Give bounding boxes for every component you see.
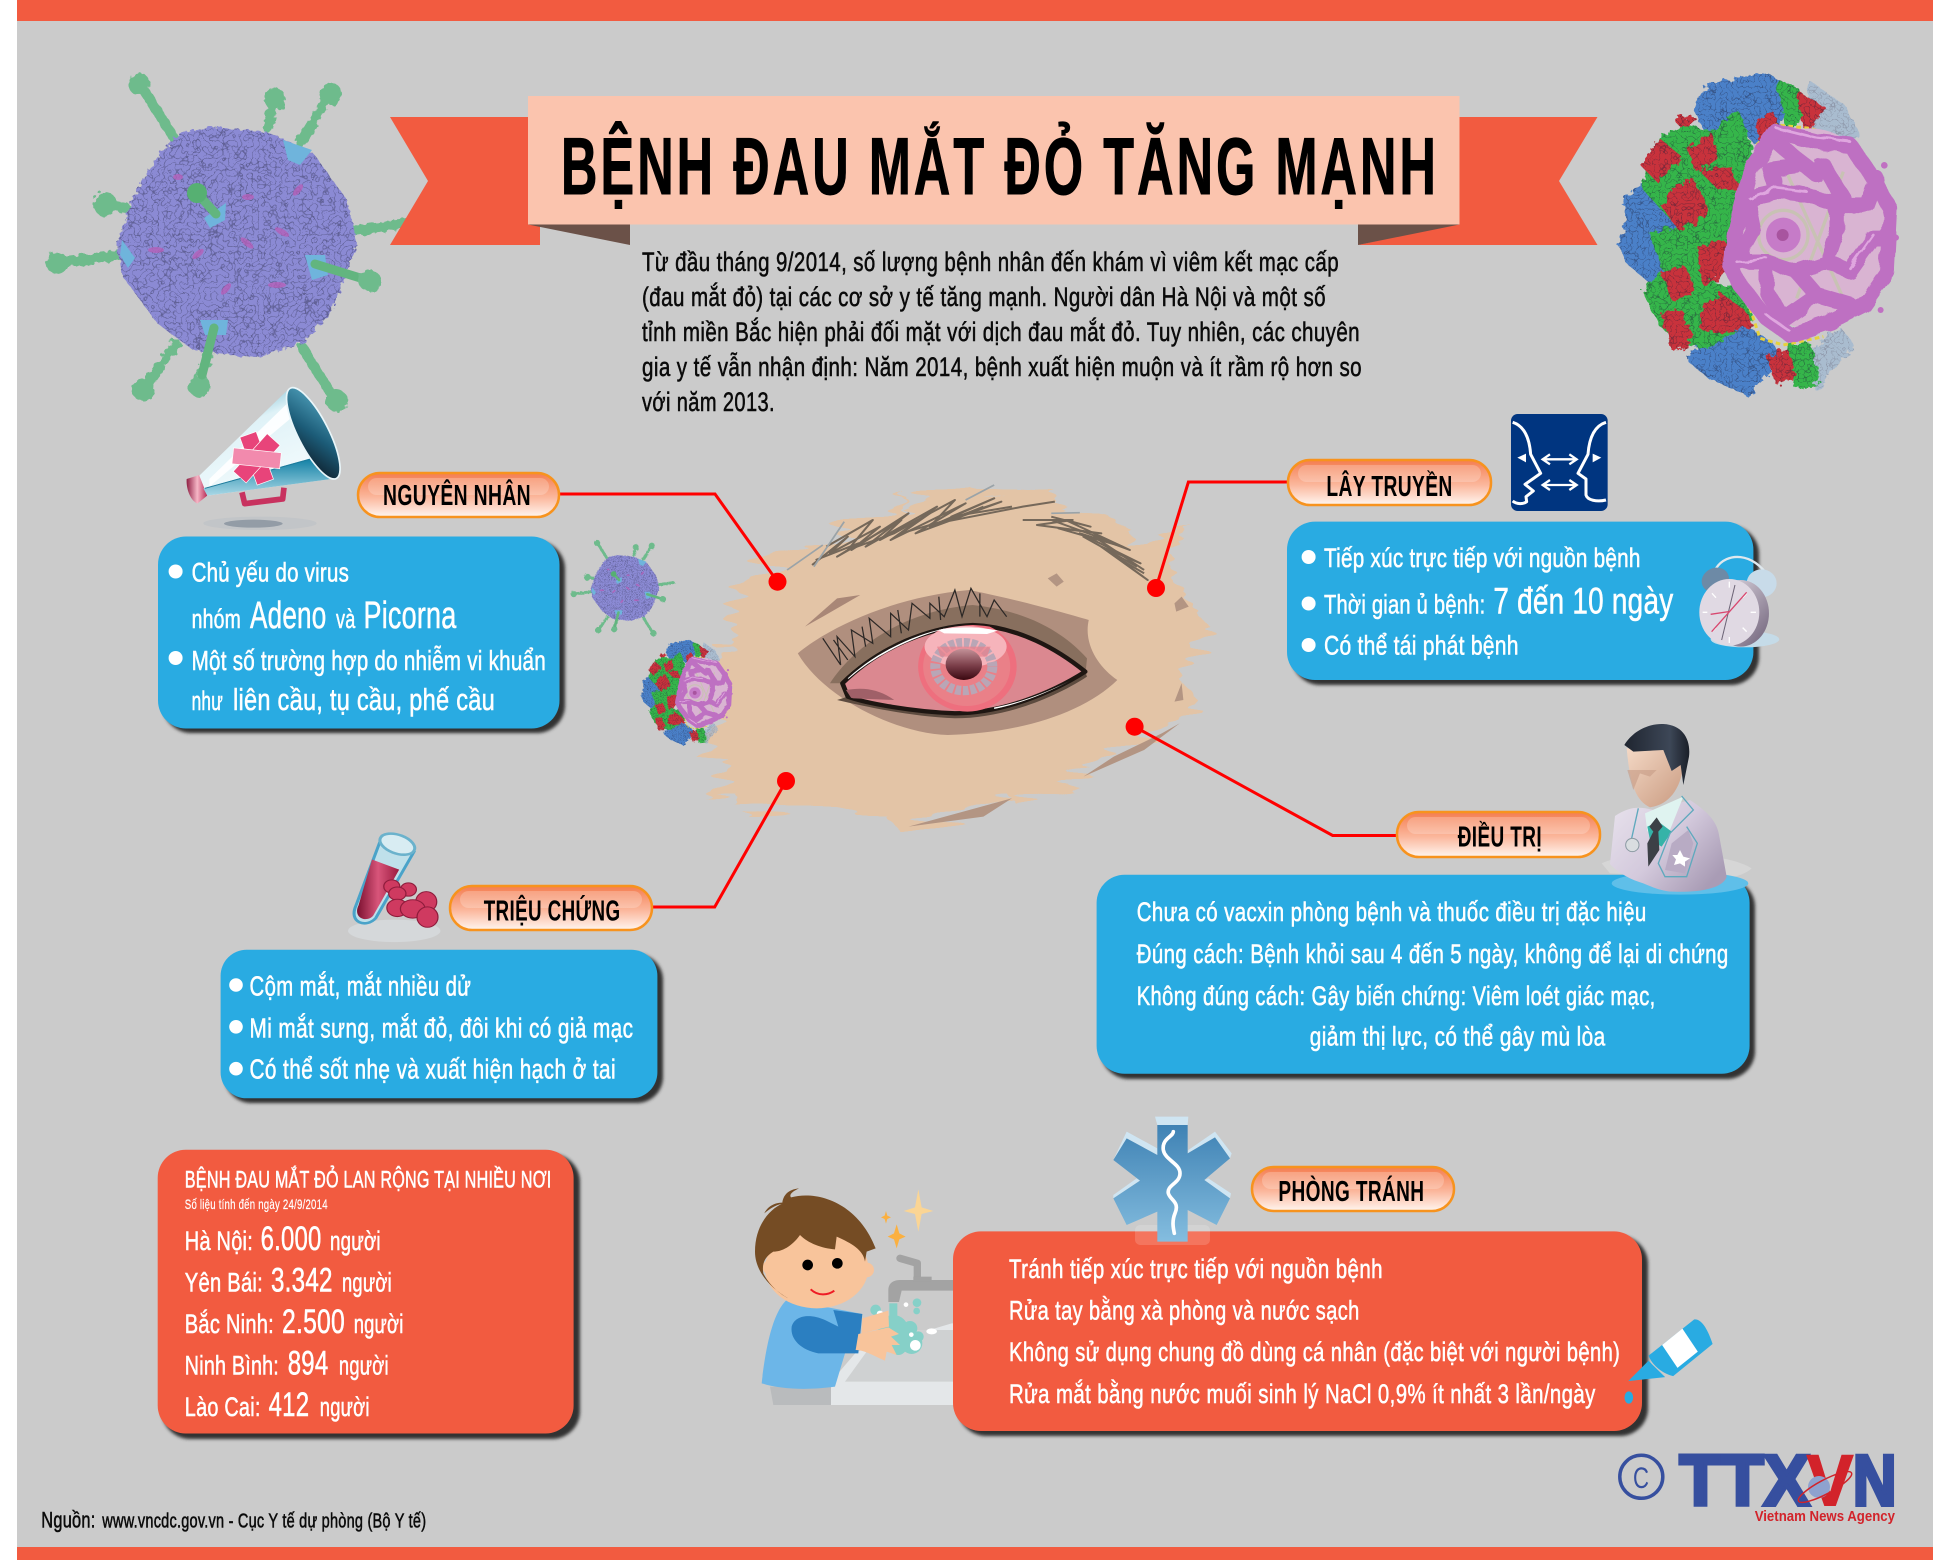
panel: triệu chứng <box>221 950 663 1103</box>
connector: lây truyền <box>1147 482 1288 597</box>
icon: star of life <box>1113 1117 1232 1245</box>
intro text: tỉnh miền Bắc hiện phải đối mặt với dịch đau mắt đỏ. Tuy nhiên, các chuyên <box>642 316 1360 347</box>
source line: Nguồn: <box>41 1508 96 1532</box>
panel: nguyên nhân: Picorna <box>364 595 457 637</box>
panel: điều trị <box>1097 875 1755 1079</box>
connector: nguyên nhân <box>559 494 786 591</box>
panel: nguyên nhân: như <box>192 686 223 716</box>
panel: triệu chứng: Có thể sốt nhẹ và xuất hiện hạch ở tai <box>250 1053 616 1084</box>
icon: megaphone <box>187 381 350 530</box>
panel: statistics <box>158 1150 580 1439</box>
intro text: gia y tế vẫn nhận định: Năm 2014, bệnh xuất hiện muộn và ít rầm rộ hơn so <box>642 351 1362 382</box>
bottom bar <box>17 1547 1933 1560</box>
panel: statistics: Bắc Ninh: <box>185 1308 274 1339</box>
label: phòng tránh <box>1252 1167 1454 1211</box>
panel: statistics: 2.500 <box>282 1303 345 1341</box>
panel: lây truyền: 7 đến 10 ngày <box>1493 581 1674 622</box>
panel: statistics: Số liệu tính đến ngày 24/9/2014 <box>185 1196 328 1212</box>
logo: TTXVN <box>1620 1442 1896 1525</box>
icon: boy washing hands <box>755 1188 958 1405</box>
panel: triệu chứng: Mi mắt sưng, mắt đỏ, đôi khi có giả mạc <box>250 1012 633 1044</box>
panel: triệu chứng: Cộm mắt, mắt nhiều dử <box>250 971 471 1002</box>
panel: nguyên nhân: Adeno <box>250 595 326 637</box>
panel: nguyên nhân: liên cầu, tụ cầu, phế cầu <box>233 682 495 717</box>
label: lây truyền: LÂY TRUYỀN <box>1326 469 1453 503</box>
intro text: Từ đầu tháng 9/2014, số lượng bệnh nhân đến khám vì viêm kết mạc cấp <box>642 247 1339 277</box>
label: điều trị <box>1397 812 1600 857</box>
logo: TTXVN: V <box>1807 1442 1853 1521</box>
panel: statistics: người <box>339 1350 389 1380</box>
label: phòng tránh: PHÒNG TRÁNH <box>1278 1174 1424 1208</box>
panel: statistics: 3.342 <box>271 1262 333 1300</box>
connector: triệu chứng <box>651 772 795 907</box>
panel: phòng tránh: Tránh tiếp xúc trực tiếp với nguồn bệnh <box>1009 1254 1383 1284</box>
panel: statistics: người <box>354 1309 404 1339</box>
capsid illustration, top right <box>1622 77 1899 392</box>
panel: statistics: Yên Bái: <box>185 1268 263 1298</box>
label: nguyên nhân: NGUYÊN NHÂN <box>383 478 531 512</box>
panel: statistics: BỆNH ĐAU MẮT ĐỎ LAN RỘNG TẠI NHIỀU NƠI <box>185 1165 552 1194</box>
panel: phòng tránh: Rửa mắt bằng nước muối sinh lý NaCl 0,9% ít nhất 3 lần/ngày <box>1009 1378 1596 1409</box>
icon: test tube <box>348 829 440 942</box>
title ribbon <box>390 96 1598 245</box>
panel: statistics: 894 <box>288 1344 328 1382</box>
panel: statistics: 6.000 <box>261 1220 322 1258</box>
icon: alarm clock <box>1698 557 1779 647</box>
label: triệu chứng: TRIỆU CHỨNG <box>484 894 620 928</box>
icon: doctor <box>1602 724 1752 895</box>
intro text: (đau mắt đỏ) tại các cơ sở y tế tăng mạnh. Người dân Hà Nội và một số <box>642 281 1326 312</box>
logo: TTXVN: Vietnam News Agency <box>1755 1509 1895 1525</box>
source line: www.vncdc.gov.vn - Cục Y tế dự phòng (Bộ Y tế) <box>102 1510 426 1532</box>
logo: TTXVN: N <box>1853 1442 1896 1521</box>
small capsid <box>642 641 733 744</box>
source line <box>41 1508 426 1532</box>
panel: statistics: Hà Nội: <box>185 1226 253 1256</box>
panel: statistics: người <box>342 1268 392 1298</box>
panel: nguyên nhân: nhóm <box>192 604 241 634</box>
panel: statistics: người <box>330 1226 381 1256</box>
panel: statistics: Ninh Bình: <box>185 1350 279 1380</box>
label: điều trị: ĐIỀU TRỊ <box>1458 820 1542 854</box>
logo: TTXVN: C <box>1633 1462 1649 1495</box>
panel: phòng tránh: Rửa tay bằng xà phòng và nước sạch <box>1009 1295 1360 1326</box>
icon: two faces <box>1511 414 1608 511</box>
panel: phòng tránh <box>953 1231 1648 1436</box>
panel: statistics: 412 <box>269 1386 309 1424</box>
panel: statistics: người <box>320 1392 370 1422</box>
label: lây truyền <box>1288 460 1491 505</box>
icon: eye drop bottle <box>1625 1319 1713 1404</box>
title ribbon: BỆNH ĐAU MẮT ĐỎ TĂNG MẠNH <box>561 121 1439 212</box>
intro text <box>642 247 1362 417</box>
panel: statistics: Lào Cai: <box>185 1392 261 1422</box>
label: nguyên nhân <box>358 473 559 517</box>
panel: nguyên nhân: và <box>336 604 356 634</box>
panel: lây truyền: Tiếp xúc trực tiếp với nguồn bệnh <box>1324 543 1641 573</box>
label: triệu chứng <box>450 886 652 930</box>
virus illustration, top left <box>46 73 407 412</box>
panel: nguyên nhân: Một số trường hợp do nhiễm vi khuẩn <box>192 645 546 676</box>
small virus <box>571 540 673 636</box>
logo: TTXVN: TTX <box>1680 1442 1810 1521</box>
panel: nguyên nhân <box>158 536 565 733</box>
top bar <box>17 0 1933 21</box>
panel: lây truyền: Thời gian ủ bệnh: <box>1324 590 1485 620</box>
eye illustration <box>696 483 1210 830</box>
panel: lây truyền: Có thể tái phát bệnh <box>1324 630 1519 660</box>
panel: điều trị: Đúng cách: Bệnh khỏi sau 4 đến 5 ngày, không để lại di chứng <box>1137 939 1729 969</box>
intro text: với năm 2013. <box>642 387 775 417</box>
panel: điều trị: Chưa có vacxin phòng bệnh và thuốc điều trị đặc hiệu <box>1137 897 1647 927</box>
panel: nguyên nhân: Chủ yếu do virus <box>192 558 349 588</box>
connector: điều trị <box>1126 718 1397 836</box>
panel: điều trị: giảm thị lực, có thể gây mù lòa <box>1310 1022 1606 1052</box>
panel: lây truyền <box>1287 522 1759 685</box>
panel: điều trị: Không đúng cách: Gây biến chứng: Viêm loét giác mạc, <box>1137 981 1656 1011</box>
panel: phòng tránh: Không sử dụng chung đồ dùng cá nhân (đặc biệt với người bệnh) <box>1009 1337 1620 1367</box>
